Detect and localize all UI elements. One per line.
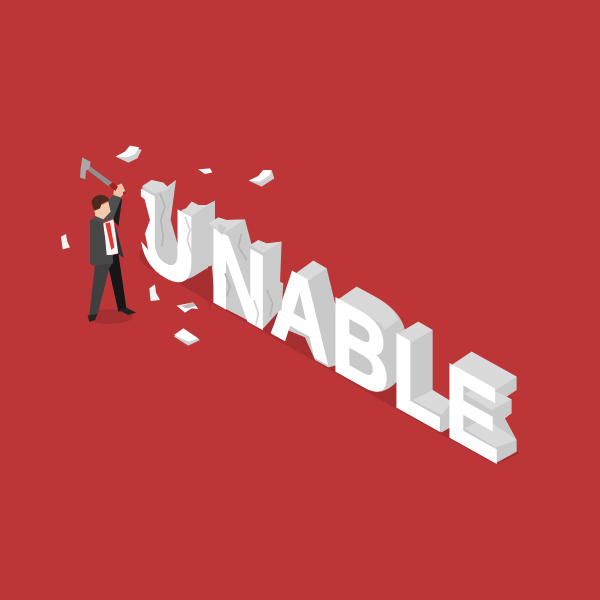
shadow under the letters bbox=[139, 238, 520, 465]
letter N extrusion bbox=[208, 217, 282, 328]
ground shadow bbox=[87, 309, 133, 324]
jacket bbox=[90, 217, 113, 265]
businessman with hammer bbox=[80, 157, 136, 324]
letter B extrusion bbox=[337, 287, 405, 392]
shoes bbox=[88, 308, 136, 322]
back arm bbox=[113, 197, 122, 227]
word UNABLE: front faces: L bbox=[392, 309, 441, 453]
word UNABLE: front faces: A bbox=[271, 237, 329, 386]
letter A extrusion bbox=[271, 261, 338, 367]
letter L extrusion bbox=[398, 322, 452, 432]
back leg bbox=[108, 253, 127, 312]
head bbox=[94, 202, 111, 219]
word UNABLE: front faces: U bbox=[137, 165, 195, 314]
letter U extrusion bbox=[142, 180, 215, 282]
word UNABLE: front faces: E bbox=[445, 339, 499, 486]
tie bbox=[105, 222, 114, 250]
hammer bbox=[80, 157, 113, 187]
front leg bbox=[89, 263, 113, 315]
broken edges on U and N bbox=[139, 195, 283, 313]
hand bbox=[113, 183, 126, 197]
word UNABLE: front faces: N bbox=[209, 204, 267, 353]
word UNABLE: front faces: B bbox=[331, 273, 389, 422]
cracks on U and N bbox=[160, 193, 273, 325]
hammer grip bbox=[109, 182, 126, 195]
shirt bbox=[103, 219, 118, 256]
letter E extrusion bbox=[452, 352, 517, 463]
word UNABLE: front faces bbox=[137, 165, 499, 486]
raised sleeve bbox=[93, 195, 122, 223]
fragment chunks bbox=[61, 146, 274, 346]
